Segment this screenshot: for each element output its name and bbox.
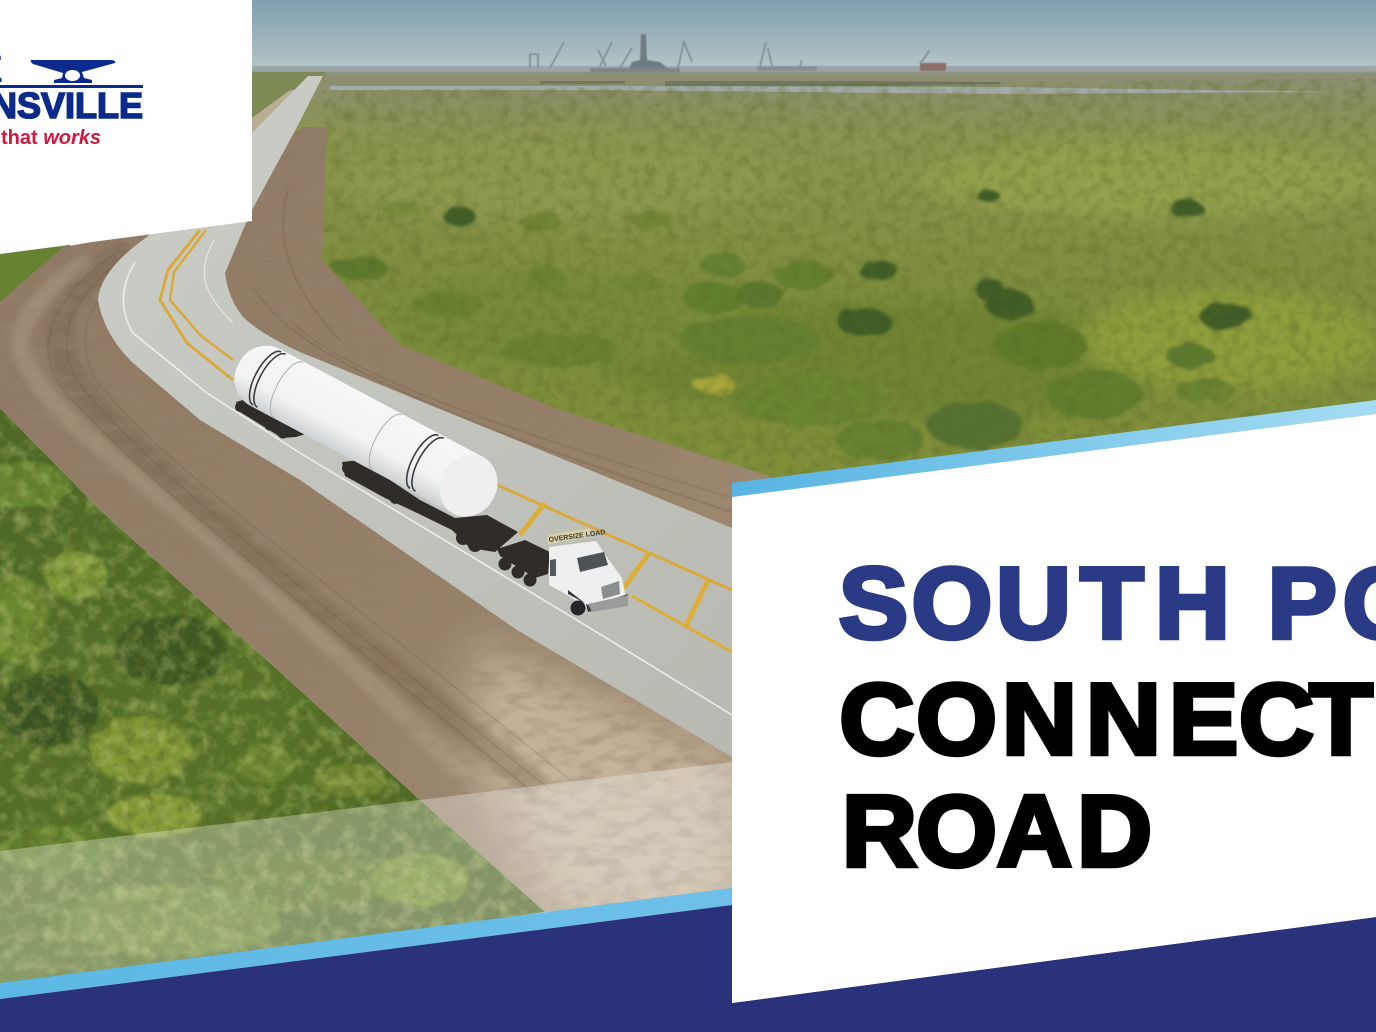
dirt shoulders [0,127,770,912]
navy footer band [0,905,1376,1032]
bushes [332,190,1292,460]
pale outer track [20,262,480,790]
field [252,70,1376,504]
field tone patches [613,145,1376,418]
tractor cab: OVERSIZE LOAD [548,529,606,544]
grass left of road [252,72,325,133]
concrete road [98,76,732,757]
white tank [224,335,508,527]
road lines [123,230,732,715]
vegetation clumps [0,461,470,956]
left vegetation [0,408,545,990]
white title panel [732,414,1376,1003]
logo: rule [0,85,143,88]
oversize load truck [224,335,628,616]
dirt texture and ruts [56,254,732,904]
pale dirt near road end [470,640,732,920]
sky [0,0,1376,70]
upper left grass [0,240,70,310]
logo [0,49,143,149]
pale track left of road [252,90,298,135]
title [839,546,1376,888]
accent stripe upper right [732,400,1376,497]
accent stripe lower left [0,888,732,999]
far water and shoreline [330,81,1345,94]
title line: Road: ROAD [842,774,1152,888]
rear dolly [235,398,312,438]
front trailer [342,460,550,586]
distant port skyline [252,34,1376,72]
tractor cab [547,528,628,616]
logo panel [0,0,252,254]
logo: cleat icon [31,60,115,83]
dark inner track [60,250,540,790]
translucent band [0,762,732,983]
